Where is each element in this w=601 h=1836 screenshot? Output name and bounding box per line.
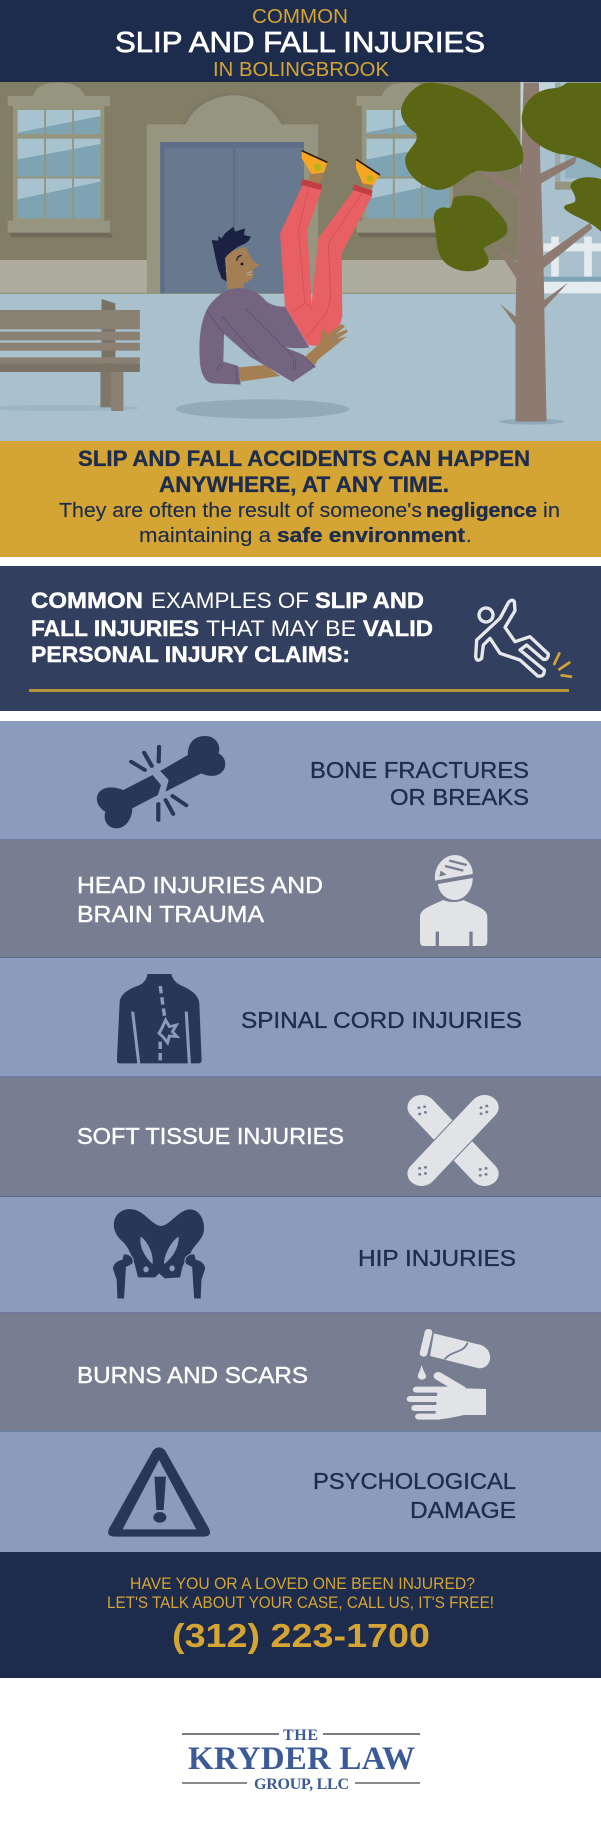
tree xyxy=(401,83,601,425)
panel: bone fractures xyxy=(0,721,601,840)
label xyxy=(77,872,323,927)
title: COMMON xyxy=(252,6,348,28)
intro heading xyxy=(78,446,530,497)
icon: bandaged head xyxy=(420,855,487,946)
section heading: EXAMPLES OF xyxy=(151,588,309,613)
label: SPINAL CORD INJURIES xyxy=(241,1007,522,1033)
section heading xyxy=(31,588,433,667)
icon: person slipping xyxy=(476,600,571,677)
icon: broken bone xyxy=(97,736,225,828)
label: PSYCHOLOGICAL xyxy=(313,1468,516,1494)
label: HEAD INJURIES AND xyxy=(77,872,323,898)
icon: warning triangle xyxy=(108,1447,210,1537)
panel: call to action xyxy=(0,1552,601,1678)
window left xyxy=(8,83,113,237)
panel: gold intro xyxy=(0,441,601,557)
intro heading: ANYWHERE, AT ANY TIME. xyxy=(159,472,449,497)
label: HIP INJURIES xyxy=(358,1245,516,1271)
intro text: They are often the result of someone's xyxy=(59,500,422,522)
label: BRAIN TRAUMA xyxy=(77,901,265,927)
door xyxy=(147,93,318,293)
section heading: THAT MAY BE xyxy=(206,616,356,641)
icon: chemical on hand xyxy=(410,1332,490,1419)
illustration: man slipping outside building xyxy=(0,82,601,443)
phone number: (312) 223-1700 xyxy=(172,1617,430,1654)
panel: head injuries xyxy=(0,840,601,958)
label: BURNS AND SCARS xyxy=(77,1362,308,1388)
icon: crossed bandages xyxy=(417,1105,488,1177)
call to action text: LET'S TALK ABOUT YOUR CASE, CALL US, IT'S FREE! xyxy=(107,1593,494,1612)
icon: spine and back xyxy=(117,974,202,1063)
intro text: safe environment xyxy=(277,525,465,547)
logo: KRYDER LAW xyxy=(188,1741,415,1777)
fence xyxy=(544,237,601,293)
panel: hip injuries xyxy=(0,1197,601,1313)
title: IN BOLINGBROOK xyxy=(213,59,390,81)
label: DAMAGE xyxy=(410,1497,516,1523)
intro heading: SLIP AND FALL ACCIDENTS CAN HAPPEN xyxy=(78,446,530,471)
bench xyxy=(0,299,140,411)
panel: spinal cord xyxy=(0,958,601,1077)
call to action text xyxy=(107,1574,494,1612)
label: BONE FRACTURES xyxy=(310,757,529,783)
icon: pelvis xyxy=(112,1209,206,1299)
intro text: negligence xyxy=(426,500,537,522)
logo: GROUP, LLC xyxy=(254,1776,349,1793)
label: SOFT TISSUE INJURIES xyxy=(77,1123,344,1149)
intro text: in xyxy=(543,500,560,522)
title: SLIP AND FALL INJURIES xyxy=(115,27,485,59)
title xyxy=(115,6,485,81)
window right xyxy=(356,83,462,237)
panel: burns and scars xyxy=(0,1313,601,1432)
label: OR BREAKS xyxy=(390,784,529,810)
logo xyxy=(182,1727,420,1793)
call to action text: HAVE YOU OR A LOVED ONE BEEN INJURED? xyxy=(130,1574,475,1593)
intro text: . xyxy=(466,525,472,547)
section heading: VALID xyxy=(363,616,433,641)
panel: common examples xyxy=(0,566,601,711)
foliage xyxy=(401,83,601,271)
man shadow xyxy=(176,399,349,419)
intro text xyxy=(59,500,560,547)
section heading: COMMON xyxy=(31,588,143,613)
section heading: FALL INJURIES xyxy=(31,616,199,641)
man falling xyxy=(199,151,380,385)
panel: title header xyxy=(0,0,601,82)
panel: psychological damage xyxy=(0,1432,601,1552)
label xyxy=(310,757,529,810)
label xyxy=(313,1468,516,1523)
intro text: maintaining a xyxy=(139,525,272,547)
section heading: PERSONAL INJURY CLAIMS: xyxy=(31,642,350,667)
section heading: SLIP AND xyxy=(315,588,424,613)
panel: soft tissue xyxy=(0,1077,601,1197)
logo: THE xyxy=(283,1727,318,1744)
